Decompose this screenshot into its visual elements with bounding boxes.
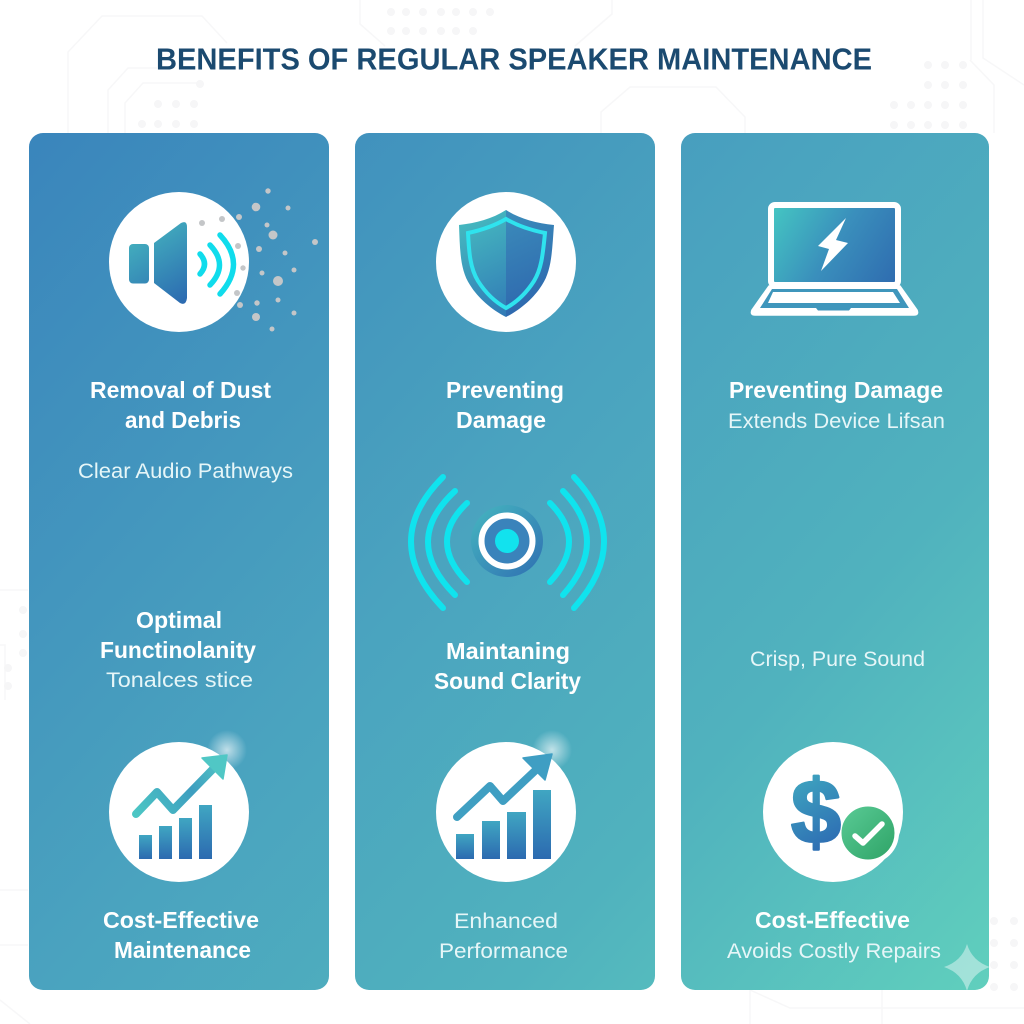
- heading line two: Functinolanity: [100, 637, 256, 663]
- icon: speaker with dust: [109, 188, 318, 332]
- heading: removal of dust and debris: Removal of Dust: [90, 377, 271, 403]
- heading line two: and Debris: [125, 407, 241, 433]
- caption: avoids costly repairs: Avoids Costly Repairs: [727, 940, 941, 963]
- heading: preventing damage: Preventing: [446, 377, 564, 403]
- icon: growth chart: [109, 730, 249, 882]
- caption: tonalces stice: Tonalces stice: [106, 669, 253, 692]
- icon: shield: [436, 192, 576, 332]
- heading line two: Maintenance: [114, 937, 251, 963]
- heading: cost-effective: Cost-Effective: [755, 907, 910, 933]
- panel: middle column: [355, 133, 655, 990]
- heading line two: Damage: [456, 407, 546, 433]
- icon: performance chart: [436, 730, 576, 882]
- heading: cost-effective maintenance: Cost-Effective: [103, 907, 259, 933]
- heading line two: Sound Clarity: [434, 668, 581, 694]
- panel: left column: [29, 133, 329, 990]
- title: BENEFITS OF REGULAR SPEAKER MAINTENANCE: [156, 42, 872, 76]
- icon: sparkle: [944, 944, 990, 991]
- icon: sound waves: [411, 477, 604, 608]
- heading: maintaining sound clarity: Maintaning: [446, 638, 570, 664]
- heading: optimal functionality: Optimal: [136, 607, 222, 633]
- caption: crisp, pure sound: Crisp, Pure Sound: [750, 648, 925, 671]
- icon: laptop: [751, 205, 918, 315]
- caption: clear audio pathways: Clear Audio Pathways: [78, 460, 293, 483]
- icon: dollar with check: $: [791, 763, 841, 863]
- caption: enhanced: Enhanced: [454, 910, 558, 933]
- heading: preventing damage: Preventing Damage: [729, 377, 943, 403]
- caption: extends device lifespan: Extends Device Lifsan: [728, 410, 945, 433]
- panel: right column: [681, 133, 990, 991]
- caption: performance: Performance: [439, 940, 568, 963]
- icon: dollar with check: [763, 742, 903, 882]
